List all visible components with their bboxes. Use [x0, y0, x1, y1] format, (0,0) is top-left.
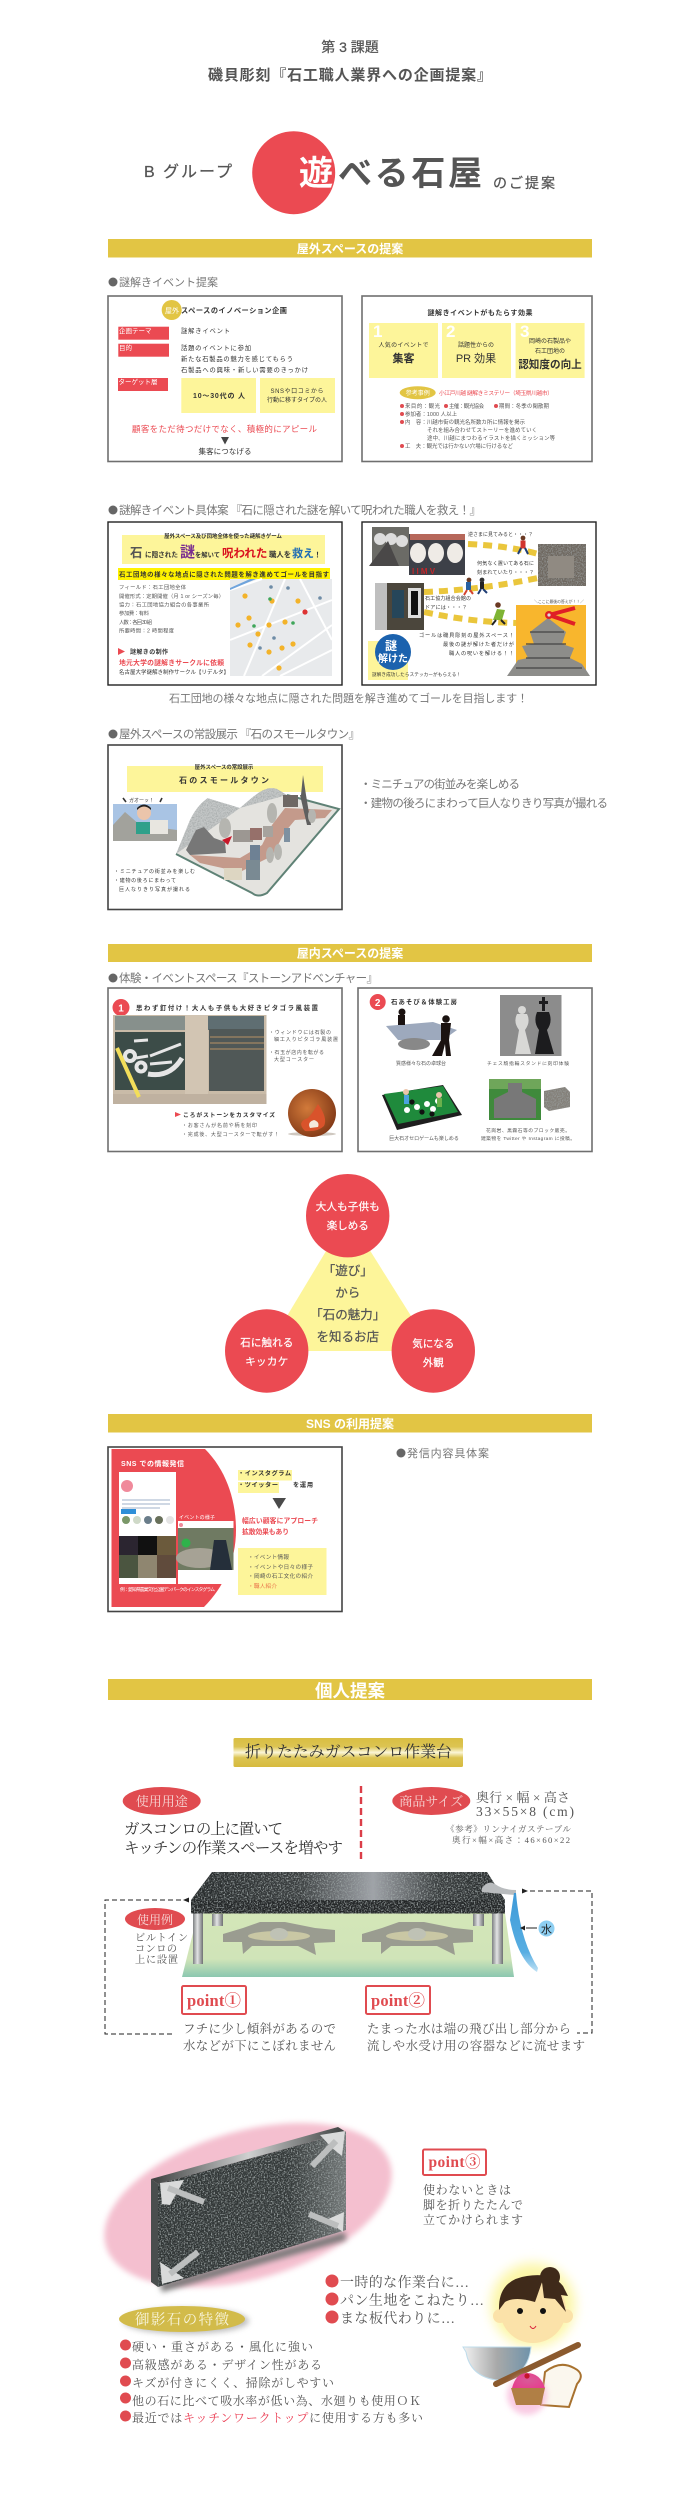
- section label: stone adventure: 体験・イベントスペース『ストーンアドベンチャー』: [119, 971, 378, 985]
- granite features list: 高級感がある・デザイン性がある: [132, 2357, 322, 2372]
- stone othello: [382, 1085, 462, 1142]
- device parts: [125, 1040, 182, 1075]
- granite feature pill: [119, 2306, 249, 2334]
- circle top: [306, 1174, 389, 1257]
- granite features list: 硬い・重さがある・風化に強い: [132, 2339, 313, 2354]
- channels: [238, 1470, 313, 1493]
- section band: indoor: [108, 944, 592, 962]
- university request: 地元大学の謎解きサークルに依頼: [119, 658, 224, 667]
- section band: sns: [108, 1414, 592, 1432]
- small town notes: ・建物の後ろにまわって巨人なりきり写真が撮れる: [360, 796, 608, 810]
- product size: [392, 1787, 574, 1845]
- game title: 謎: [180, 544, 195, 561]
- heading: 思わず釘付け！大人も子供も大好きピタゴラ風装置: [136, 1003, 319, 1012]
- reference detail: それを組み合わせてストーリーを進めていく: [427, 426, 537, 434]
- group heading: 遊べる石屋: [144, 131, 555, 214]
- panel: event overview: 屋外: [165, 306, 179, 315]
- panel: stone play workshop: [358, 988, 592, 1152]
- rolling pin: [496, 2345, 578, 2384]
- effect 2: 話題性からの: [458, 341, 494, 349]
- point 2: point②: [371, 1991, 425, 2010]
- stone table tennis: 質感様々な石の卓球台: [396, 1060, 446, 1067]
- down arrow: [221, 437, 229, 444]
- content box: ・職人紹介: [248, 1582, 277, 1590]
- game details: 参加費：有料: [119, 609, 150, 617]
- panel: event overview: 目的: [119, 343, 132, 352]
- cupcake: [507, 2375, 547, 2415]
- bowl: [463, 2347, 531, 2380]
- reference detail: 主催：観光協会: [449, 402, 485, 410]
- number badge: [370, 994, 386, 1010]
- route text: 逆さまに見てみると・・・？: [468, 531, 533, 538]
- label purpose: [118, 344, 169, 357]
- point 1: [182, 1986, 336, 2053]
- target box 1: [181, 378, 256, 413]
- point 3: [423, 2150, 523, 2227]
- concept text: 「遊び」: [323, 1263, 373, 1278]
- reference detail: 途中、川越にまつわるイラストを描くミッション等: [427, 434, 556, 442]
- channels: を運用: [293, 1481, 313, 1489]
- usage ideas: まな板代わりに…: [340, 2310, 455, 2327]
- panel: game plan: 屋外スペース及び団地全体を使った謎解きゲーム: [164, 532, 282, 540]
- customize notes: ・お客さんが名前や柄を刻印: [182, 1122, 257, 1129]
- badge: [162, 300, 182, 320]
- ears: [493, 2309, 507, 2323]
- bread: [541, 2365, 581, 2407]
- usage pill: [123, 1787, 201, 1815]
- section label: small town: 屋外スペースの常設展示 『石のスモールタウン』: [119, 728, 360, 741]
- device notes: ・ウィンドウには石製の: [269, 1029, 331, 1036]
- product size: 商品サイズ: [399, 1794, 463, 1809]
- circle right: 外観: [423, 1356, 444, 1369]
- section band: individual: 個人提案: [315, 1681, 385, 1701]
- panel: sns: 拡散効果もあり: [242, 1527, 289, 1536]
- route text: 職人の呪いを解ける！！: [449, 649, 514, 657]
- banner: [127, 766, 323, 792]
- point 2: 流しや水受け用の容器などに流せます: [367, 2038, 585, 2053]
- town bullet text: [114, 868, 195, 893]
- panel: pythagora device: 1: [118, 1004, 124, 1014]
- photo: carvings upside-down clue: [369, 527, 409, 566]
- product illustration: worktop over stove: 使用例: [137, 1912, 173, 1927]
- heading: 謎解きイベントがもたらす効果: [428, 308, 532, 317]
- game details: 所要時間：2 時間程度: [119, 626, 175, 634]
- content box: [238, 1548, 326, 1595]
- goal castle: [507, 605, 590, 676]
- panel: sns: [108, 1447, 342, 1612]
- town diorama: [176, 775, 339, 896]
- small town notes: ・ミニチュアの街並みを楽しめる: [360, 777, 520, 791]
- section band: outdoor: [108, 239, 592, 258]
- game title: 石: [130, 546, 143, 560]
- slab front: [191, 1900, 505, 1914]
- reference detail: 工 夫：観光では行かない穴場に行けるなど: [405, 442, 514, 450]
- stone table tennis: [386, 1008, 457, 1067]
- stone ball: [288, 1089, 336, 1137]
- event photo label: イベントの様子: [179, 1514, 215, 1521]
- slab top: [191, 1872, 505, 1900]
- burner right: [362, 1922, 473, 1955]
- usage text: ガスコンロの上に置いて: [124, 1820, 283, 1838]
- device notes: 大型コースター: [274, 1056, 314, 1063]
- reference detail: 来目的：観光: [405, 402, 441, 410]
- game title: に隠された: [145, 550, 178, 559]
- stone othello: 巨大石オセロゲームも楽しめる: [389, 1135, 459, 1142]
- photo: door: [375, 583, 424, 630]
- effect 1: 集客: [392, 351, 414, 365]
- water callout: 水: [541, 1923, 552, 1936]
- panel: small town: 石のスモールタウン: [179, 775, 269, 785]
- panel: pythagora device: ・完成後、大型コースターで転がす！: [182, 1131, 279, 1138]
- map: [230, 579, 332, 676]
- route text: 最後の謎が解けた者だけが: [443, 640, 515, 648]
- section label: content details: 発信内容具体案: [407, 1446, 489, 1460]
- customize heading: [175, 1112, 181, 1117]
- panel: event overview: 謎解きイベント: [181, 326, 230, 335]
- pin: [545, 608, 575, 624]
- size text: 奥行 × 幅 × 高さ: [476, 1790, 570, 1805]
- town bullet text: ・ミニチュアの街並みを楽しむ: [114, 868, 195, 875]
- effect 3: [516, 322, 585, 378]
- channels: ・ツイッター: [238, 1481, 278, 1489]
- game title: [130, 544, 321, 561]
- panel: stone play workshop: 2: [375, 998, 381, 1009]
- yellow triangle: [266, 1215, 433, 1351]
- block sale: [481, 1079, 575, 1142]
- result: 集客につなげる: [198, 446, 252, 456]
- sns heading: SNS での情報発信: [121, 1459, 184, 1468]
- product title plate: 折りたたみガスコンロ作業台: [245, 1743, 452, 1761]
- character illustration: [463, 2263, 581, 2415]
- effect 1: [369, 322, 438, 378]
- product title plate: [234, 1738, 463, 1767]
- game title: を解いて: [195, 550, 220, 559]
- title: 磯貝彫刻『石工職人業界への企画提案』: [208, 66, 492, 84]
- burner left: [223, 1922, 335, 1955]
- circle right: [392, 1309, 475, 1393]
- content box: ・岡崎の石工文化の紹介: [248, 1572, 313, 1580]
- usage ideas: 一時的な作業台に…: [340, 2274, 469, 2291]
- photo: giant: [113, 797, 177, 841]
- concept text: を知るお店: [316, 1330, 379, 1344]
- usage: キッチンの作業スペースを増やす: [124, 1839, 343, 1857]
- granite feature pill: 御影石の特徴: [135, 2312, 230, 2328]
- purpose text: 話題のイベントに参加: [181, 343, 251, 352]
- effect 2: 2: [446, 322, 455, 341]
- target box 2: [260, 378, 335, 413]
- game title: 救え: [292, 547, 314, 560]
- diagram: three circle concept: [225, 1174, 475, 1393]
- route text: ＼ここに最後の答えが！！／: [534, 598, 584, 604]
- effect 2: [442, 322, 511, 378]
- usage ideas: [326, 2274, 484, 2327]
- suffix: のご提案: [493, 175, 555, 191]
- route dashes: [424, 544, 538, 623]
- water flow: [510, 1893, 538, 1972]
- small town notes: [360, 777, 608, 810]
- route text: ドアには・・・？: [425, 605, 467, 611]
- shop photo: [113, 1015, 266, 1104]
- panel: game plan: 名古屋大学謎解き制作サークル【リデルタ】: [119, 668, 229, 676]
- panel: event overview: 10～30代の 人: [193, 392, 245, 400]
- label target: [118, 378, 168, 391]
- panel: pythagora device: [108, 988, 342, 1152]
- effect 1: 人気のイベントで: [378, 341, 428, 349]
- legs: [160, 2131, 345, 2284]
- point 3: 立てかけられます: [423, 2212, 523, 2227]
- panel: game route: [362, 522, 596, 685]
- concept text: [310, 1263, 385, 1344]
- route text: 謎解き成功したらステッカーがもらえる！: [372, 671, 461, 678]
- example pill: [125, 1908, 185, 1930]
- photo: stone: [538, 544, 586, 586]
- concept text: から: [335, 1286, 360, 1300]
- panel: game plan: 石工団地の様々な地点に隠された問題を解き進めてゴールを目指す: [119, 570, 329, 578]
- example text: コンロの: [135, 1944, 177, 1955]
- point 1: フチに少し傾斜があるので: [183, 2021, 336, 2036]
- effect 3: 3: [520, 322, 529, 341]
- divider: [360, 1786, 362, 1860]
- reference case: 参考事例: [406, 389, 430, 397]
- town bullet text: 巨人なりきり写真が撮れる: [119, 886, 190, 893]
- section label: event proposal: 謎解きイベント提案: [119, 275, 218, 289]
- game banner: [122, 535, 325, 564]
- route text: ゴールは磯貝彫刻の屋外スペース！: [419, 631, 514, 639]
- instagram caption: 例：愛知県農業文化公園デンパークのインスタグラム: [120, 1586, 215, 1593]
- green stove base: [182, 1913, 514, 1977]
- red shape: [112, 1449, 236, 1607]
- usage ideas: パン生地をこねたり…: [340, 2292, 484, 2309]
- effect 3: 岡崎の石製品や: [529, 337, 571, 345]
- game title: ！: [314, 551, 321, 559]
- panel: small town: 屋外スペースの常設展示: [195, 763, 254, 771]
- number badge: [112, 999, 130, 1016]
- map stars: [235, 593, 301, 671]
- reference case: [400, 386, 553, 399]
- product illustration: worktop over stove: [105, 1872, 592, 2034]
- panel: event overview: [108, 296, 342, 462]
- usage: [123, 1787, 343, 1857]
- panel heading: スペースのイノベーション企画: [181, 306, 287, 315]
- glow: [491, 2263, 575, 2347]
- slab left edge: [151, 2179, 158, 2287]
- back legs: [212, 1914, 223, 1926]
- device notes: ・石玉が店内を転がる: [269, 1049, 324, 1056]
- red reach text: 幅広い顧客にアプローチ: [242, 1516, 318, 1525]
- section band: outdoor: 屋外スペースの提案: [297, 241, 403, 256]
- game details: [119, 583, 224, 634]
- panel: event overview: ターゲット層: [118, 377, 158, 386]
- block sale: 建築物を Twitter や Instagram に投稿。: [481, 1135, 575, 1142]
- down arrow: [272, 1498, 286, 1509]
- route text: 石工協力組合会館の: [425, 595, 471, 602]
- granite features list: 他の石に比べて吸水率が低い為、水廻りも使用ＯＫ: [132, 2393, 421, 2408]
- slab shadow: [160, 2232, 346, 2292]
- label theme: [118, 327, 169, 340]
- point 1: point①: [187, 1991, 241, 2010]
- route text: [372, 531, 584, 678]
- runners: [464, 536, 528, 625]
- chess pieces: チェス駒指輪スタンドに刻印体験: [487, 1060, 569, 1067]
- game details: 協力：石工団地協力組合の各事業所: [119, 600, 210, 608]
- point 1: 水などが下にこぼれません: [183, 2038, 336, 2053]
- route text: 刻まれていたり・・・？: [477, 569, 534, 576]
- town bullet text: ・建物の後ろにまわって: [114, 877, 176, 884]
- reference detail: 参加者：1000 人以上: [405, 410, 458, 418]
- game details: 人数：各回 30 組: [119, 618, 153, 626]
- water callout: [520, 1920, 554, 1936]
- effect 3: 石工団地の: [535, 347, 565, 355]
- reference case: 小江戸川越 謎解きミステリー（埼玉県川越市）: [439, 389, 553, 397]
- reference detail: [400, 402, 556, 450]
- example text: [135, 1932, 188, 1966]
- photo: giant: ガオーッ！: [129, 797, 154, 804]
- concept text: 「石の魅力」: [310, 1307, 385, 1322]
- product size: 奥行×幅×高さ：46×60×22: [452, 1834, 570, 1845]
- sticker: [368, 634, 411, 680]
- instagram mock 1: [119, 1472, 176, 1584]
- point 2: たまった水は端の飛び出し部分から: [367, 2021, 571, 2036]
- circle left: [225, 1309, 308, 1393]
- reference size: 《参考》リンナイガステーブル: [446, 1823, 571, 1834]
- sticker: 謎: [385, 638, 397, 653]
- point 3: 脚を折りたたんで: [423, 2197, 523, 2212]
- point 3: point③: [428, 2153, 480, 2171]
- panel: pythagora device: ころがストーンをカスタマイズ: [183, 1111, 275, 1119]
- section band: individual: [108, 1679, 592, 1701]
- size pill: [392, 1787, 470, 1815]
- panel: event overview: 石製品への興味・新しい需要のきっかけ: [181, 365, 308, 374]
- content box: ・イベント情報: [248, 1553, 289, 1561]
- granite features list: キズが付きにくく、掃除がしやすい: [132, 2375, 334, 2390]
- slab face: [158, 2132, 346, 2287]
- game details: 開催形式：定期開催（月 1 or シーズン毎）: [119, 592, 224, 600]
- brown path: [190, 808, 332, 872]
- block sale: 花崗岩、黒霧石等のブロック販売。: [486, 1127, 570, 1134]
- eyes: [517, 2308, 523, 2314]
- reference detail: 内 容：川越市街の観光名所数カ所に情報を掲示: [405, 418, 526, 426]
- panel: game plan: 謎解きの制作: [130, 648, 168, 656]
- section band: indoor: 屋内スペースの提案: [297, 946, 403, 960]
- title: [208, 39, 492, 84]
- granite features list: 最近ではキッチンワークトップに使用する方も多い: [132, 2410, 423, 2425]
- heading: 石あそび＆体験工房: [391, 997, 458, 1006]
- photo: carved faces: I I M V: [412, 567, 436, 576]
- section label: event concrete plan: 謎解きイベント具体案 『石に隠された謎を解いて呪われた職人を救え！』: [119, 503, 481, 517]
- front legs: [193, 1913, 203, 1964]
- circle left: 石に触れる: [240, 1336, 293, 1349]
- title: 第 3 課題: [321, 39, 379, 55]
- pink ellipse: [85, 2093, 411, 2317]
- circle top: 大人も子供も: [316, 1200, 380, 1213]
- panel: event effects: [362, 296, 592, 462]
- game title: 職人を: [269, 550, 291, 559]
- map pin: [302, 609, 308, 615]
- buildings: [186, 827, 226, 855]
- folded worktop illustration: [85, 2093, 411, 2317]
- panel: event overview: 行動に移すタイプの人: [267, 396, 327, 404]
- effect 1: 1: [373, 322, 382, 341]
- route text: 何気なく置いてある石に: [477, 560, 534, 567]
- dashed callout lines: [105, 1900, 189, 2034]
- effect 3: 認知度の向上: [518, 358, 582, 371]
- hair: [499, 2275, 568, 2312]
- product size: 33×55×8 (cm): [476, 1804, 574, 1819]
- device notes: 細工入りピタゴラ風装置: [274, 1036, 338, 1043]
- panel: event overview: 企画テーマ: [119, 326, 152, 335]
- play character: 遊: [299, 155, 333, 193]
- content box: ・イベントや日々の様子: [248, 1563, 313, 1571]
- circle left: キッカケ: [245, 1356, 288, 1368]
- granite features list: [120, 2339, 423, 2425]
- face: [500, 2277, 566, 2343]
- channels: ・インスタグラム: [238, 1470, 291, 1478]
- spout: [482, 1883, 516, 1895]
- photo: carved faces: [409, 534, 465, 576]
- caption: game plan: 石工団地の様々な地点に隠された問題を解き進めてゴールを目指します！: [169, 691, 528, 705]
- production arrow: [118, 648, 125, 655]
- panel: small town: [108, 745, 342, 910]
- effect 2: PR 効果: [456, 352, 496, 365]
- device notes: [269, 1029, 338, 1063]
- example text: 上に設置: [135, 1953, 178, 1966]
- panel: event overview: SNSや口コミから: [270, 387, 324, 395]
- panel: game plan: [108, 522, 342, 685]
- instagram mock 2: [176, 1521, 234, 1584]
- slab top edge: [151, 2127, 346, 2184]
- circle top: 楽しめる: [327, 1219, 369, 1232]
- highlight line: [118, 568, 330, 580]
- red appeal line: 顧客をただ待つだけでなく、積極的にアピール: [132, 424, 317, 434]
- section band: sns: SNS の利用提案: [306, 1416, 394, 1431]
- red circle: [252, 131, 335, 214]
- sticker: 解けた: [378, 652, 408, 665]
- shop name: べる石屋: [338, 155, 482, 193]
- circle right: 気になる: [412, 1337, 454, 1350]
- example text: ビルトイン: [135, 1932, 188, 1944]
- group name: B グループ: [144, 163, 232, 181]
- game title: 呪われた: [222, 547, 267, 560]
- reference detail: 期間：冬季の閑散期: [499, 402, 549, 410]
- point 3: 使わないときは: [423, 2182, 511, 2197]
- game details: フィールド：石工団地全体: [119, 583, 187, 591]
- chess pieces: [487, 995, 569, 1067]
- usage: 使用用途: [136, 1794, 188, 1809]
- panel: event overview: 新たな石製品の魅力を感じてもらう: [181, 354, 293, 363]
- point 2: [366, 1986, 585, 2053]
